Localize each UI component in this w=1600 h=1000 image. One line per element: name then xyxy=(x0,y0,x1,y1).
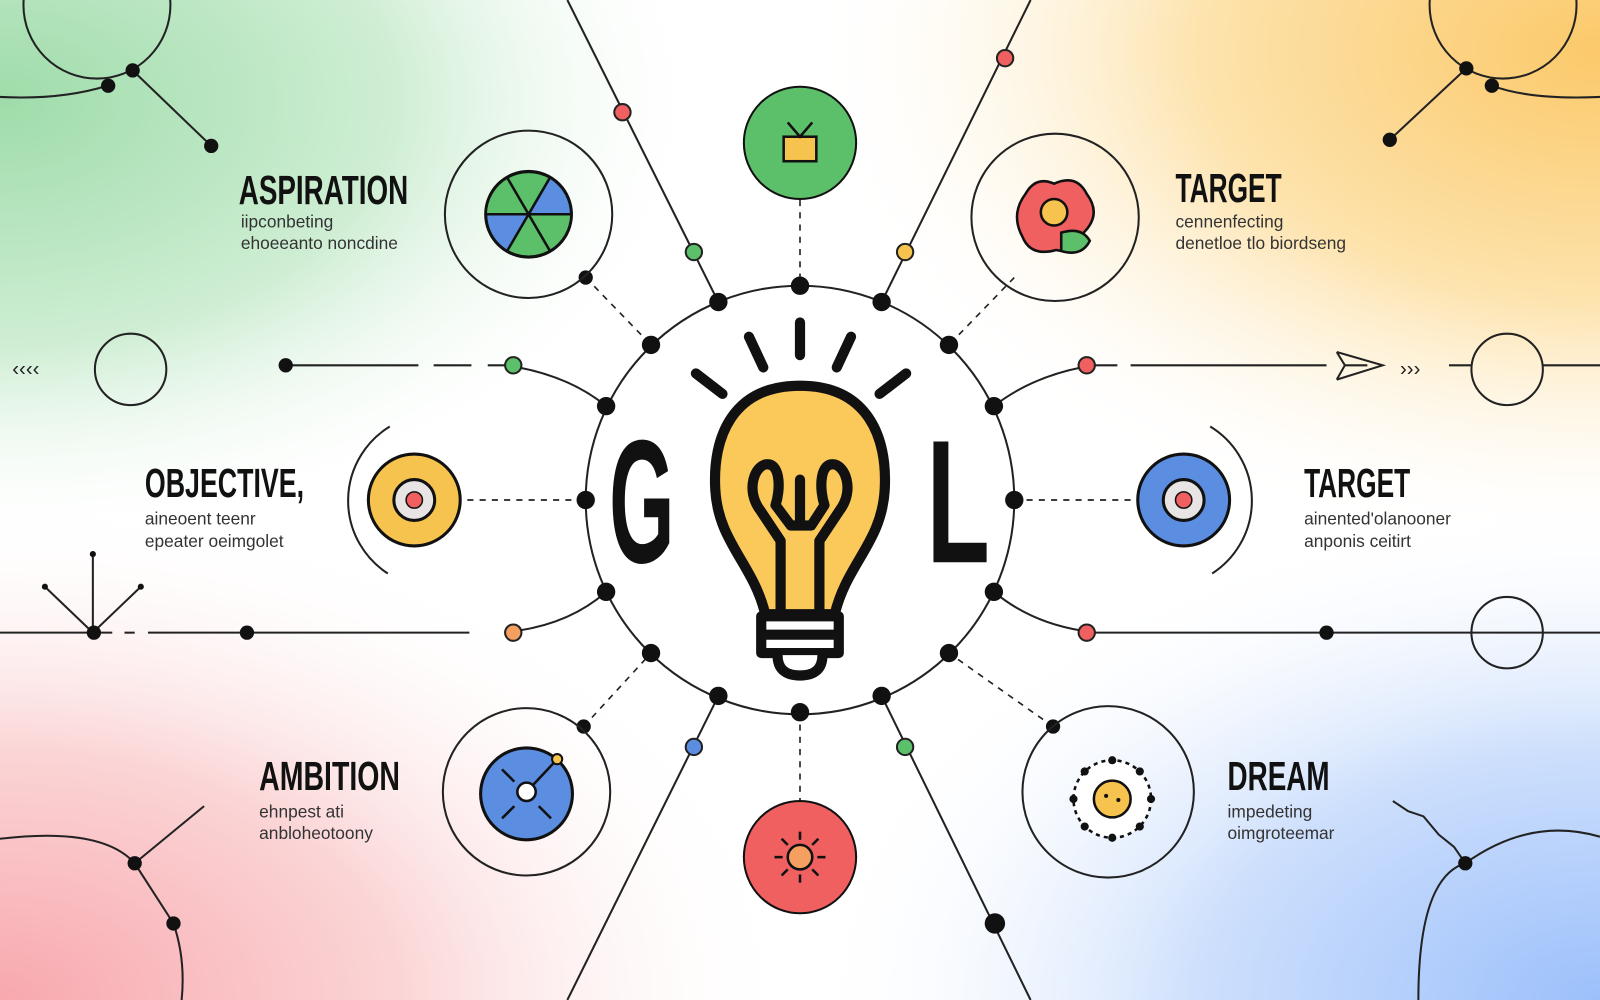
panel: objective: epeater oeimgolet xyxy=(145,531,284,551)
panel: ambition xyxy=(259,708,610,876)
panel: dream: impedeting xyxy=(1228,801,1312,821)
icon: bottom red sun xyxy=(744,801,856,913)
panel: ambition: ehnpest ati xyxy=(259,801,344,821)
panel: ambition: anbloheotoony xyxy=(259,823,373,843)
panel: target (middle): ainented'olanooner xyxy=(1304,508,1451,528)
text: ››› xyxy=(1400,359,1420,381)
panel: objective: OBJECTIVE, xyxy=(145,460,304,506)
panel: ambition: AMBITION xyxy=(259,753,400,799)
panel: target (middle) xyxy=(1138,427,1451,573)
panel: target (middle): TARGET xyxy=(1304,460,1410,506)
panel: target (top) xyxy=(971,134,1346,301)
title letters G L: L xyxy=(927,404,990,600)
panel: dream: DREAM xyxy=(1228,753,1330,799)
panel: objective xyxy=(145,427,460,573)
icon: top green tv xyxy=(744,87,856,199)
panel: aspiration: ASPIRATION xyxy=(239,167,408,213)
panel: aspiration xyxy=(239,131,612,298)
panel: target (top): TARGET xyxy=(1176,165,1282,211)
panel: dream: oimgroteemar xyxy=(1228,823,1335,843)
panel: dream xyxy=(1022,706,1335,878)
panel: target (top): cennenfecting xyxy=(1176,212,1283,232)
central circle xyxy=(577,277,1023,721)
title letters G L xyxy=(609,404,990,600)
side decorations: arrows and circles xyxy=(95,334,1543,668)
title letters G L: G xyxy=(609,404,674,600)
panel: objective: aineoent teenr xyxy=(145,508,256,528)
panel: target (middle): anponis ceitirt xyxy=(1304,531,1411,551)
icon: light bulb xyxy=(696,322,906,676)
text: ‹‹‹‹ xyxy=(12,359,39,381)
panel: aspiration: ehoeeanto noncdine xyxy=(241,233,398,253)
panel: aspiration: iipconbeting xyxy=(241,212,333,232)
panel: target (top): denetloe tlo biordseng xyxy=(1176,233,1346,253)
